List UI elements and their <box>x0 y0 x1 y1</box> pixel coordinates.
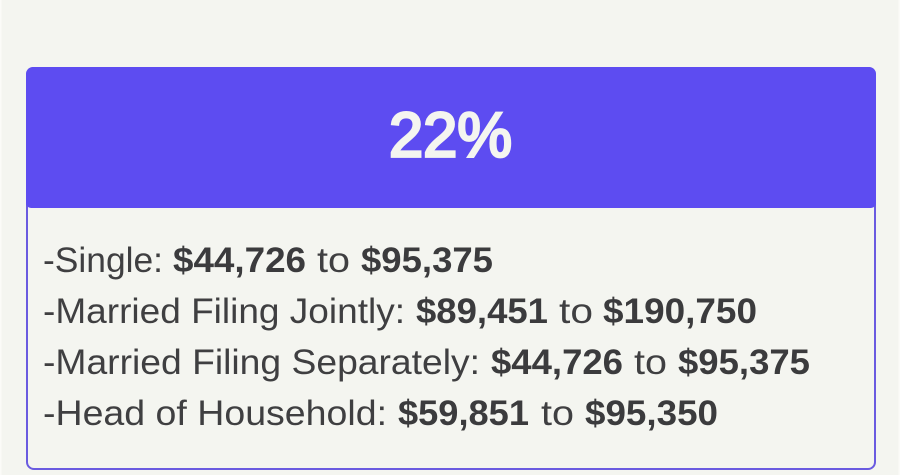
line: married filing jointly: -Married Filing Jointly: <box>43 292 405 331</box>
line: married filing separately <box>43 343 810 382</box>
line: married filing jointly <box>43 292 757 331</box>
line: head of household: -Head of Household: <box>43 394 387 433</box>
line: married filing separately: to <box>634 343 667 382</box>
line: married filing jointly: $89,451 <box>416 292 548 331</box>
card: 22% tax bracket <box>26 67 876 469</box>
line: married filing jointly: to <box>559 292 593 331</box>
line: single <box>43 241 493 280</box>
line: head of household: to <box>541 394 574 433</box>
line: single: $95,375 <box>361 241 493 280</box>
line: head of household: $95,350 <box>585 394 718 433</box>
line: married filing separately: $95,375 <box>678 343 810 382</box>
line: married filing separately: -Married Filing Separately: <box>43 343 480 382</box>
text block: income ranges <box>43 241 810 433</box>
line: single: -Single: <box>43 241 163 280</box>
line: married filing separately: $44,726 <box>491 343 623 382</box>
card outline <box>27 68 875 469</box>
line: single: to <box>317 241 350 280</box>
line: head of household <box>43 394 718 433</box>
line: single: $44,726 <box>173 241 306 280</box>
heading: 22%: 22% <box>389 100 512 170</box>
header banner <box>26 67 876 208</box>
line: married filing jointly: $190,750 <box>603 292 757 331</box>
line: head of household: $59,851 <box>398 394 529 433</box>
